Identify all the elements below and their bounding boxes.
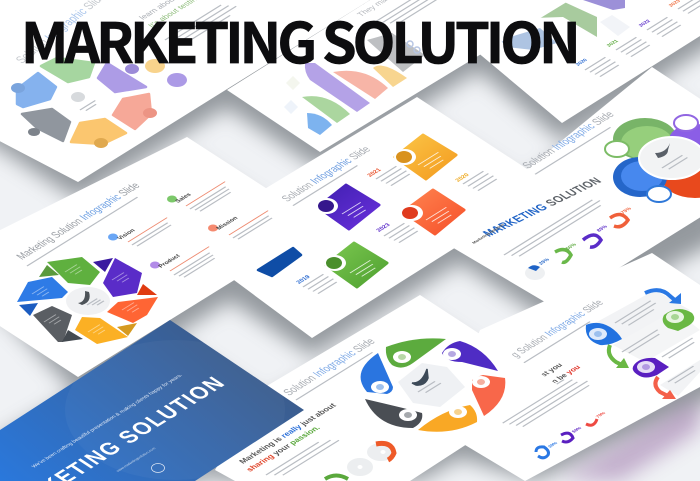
year label 2023: 2023 — [376, 222, 393, 233]
badge green — [605, 141, 629, 157]
mission item: Mission — [216, 216, 240, 231]
blue circle — [613, 157, 667, 197]
title underline — [534, 127, 610, 175]
centre icon — [71, 92, 85, 102]
purple shape — [583, 0, 625, 10]
decorative circle — [65, 340, 285, 480]
orange circle — [662, 158, 700, 198]
segment badges — [11, 64, 157, 148]
green inner — [621, 126, 673, 160]
product item: Product — [158, 254, 182, 269]
yellow sector — [418, 405, 477, 432]
sector badges — [371, 348, 490, 421]
green teardrop — [663, 309, 694, 331]
title underline — [286, 165, 357, 210]
sales item: Sales — [175, 192, 194, 204]
red sector — [472, 375, 505, 416]
stat purple: 85% — [596, 224, 610, 233]
green shape — [533, 0, 597, 37]
icon: swoosh — [655, 143, 670, 158]
centre hexagon — [398, 363, 465, 407]
icon: small star — [286, 76, 300, 90]
green corner — [39, 265, 59, 277]
slide title: g Solution Infographic Slide — [508, 298, 607, 360]
stat red: 75% — [620, 206, 634, 215]
timeline text lines — [585, 0, 700, 78]
bar purple — [305, 63, 370, 112]
slide: top right timeline — [415, 0, 700, 123]
purple teardrop — [633, 358, 669, 378]
icon: swoosh — [412, 369, 428, 385]
green segment — [41, 58, 94, 82]
heading line two: an be you — [545, 363, 583, 387]
vision item — [108, 218, 171, 247]
title underline — [27, 197, 138, 266]
stat red ring: 70% — [595, 411, 606, 419]
blue inner — [621, 161, 663, 191]
year label 2021: 2021 — [606, 39, 620, 48]
blue corner — [19, 303, 38, 316]
title underline — [522, 322, 590, 364]
slide: centre year cards — [180, 97, 553, 338]
grey panel 2 — [613, 310, 700, 362]
text lines — [165, 1, 240, 48]
stat red ring — [586, 411, 606, 425]
icon: play circle — [152, 464, 164, 472]
yellow card — [394, 135, 456, 179]
slide: left octagon — [0, 137, 323, 377]
red ring stat — [367, 443, 395, 461]
red card — [401, 190, 464, 234]
centre disc — [66, 287, 110, 315]
cover tagline: We've been crafting beautiful presentation & making clients happy for years. — [31, 373, 184, 469]
centre lines — [87, 298, 104, 308]
blue segment — [17, 277, 68, 302]
yellow segment — [71, 119, 126, 144]
heading line two: sharing your passion. — [244, 424, 322, 473]
stat blue ring — [536, 441, 558, 458]
year label 2020: 2020 — [455, 172, 472, 183]
product item — [150, 247, 216, 279]
mission item — [208, 211, 272, 240]
blue card — [258, 248, 301, 276]
year label 2019: 2019 — [296, 274, 313, 285]
slide title: Solution Infographic Slide — [520, 109, 618, 171]
purple shadow tint bottom right — [560, 398, 700, 481]
year label 2021: 2021 — [367, 167, 384, 178]
centre lines — [662, 155, 687, 171]
grey shape — [367, 33, 425, 72]
panel lines — [615, 300, 698, 385]
purple sector — [442, 341, 498, 371]
faded blue shape — [500, 28, 557, 50]
sales item — [167, 182, 232, 213]
purple circle — [669, 124, 700, 156]
slide title: g Solution Infographic Slide — [273, 145, 374, 208]
stat red — [610, 206, 634, 227]
arrow: blue — [645, 290, 681, 304]
slide: top centre bar chart — [227, 0, 570, 152]
purple corner — [93, 258, 113, 272]
stat purple — [583, 224, 610, 247]
body lines — [504, 198, 604, 260]
slide title: Marketing Solution Infographic Slide — [14, 181, 143, 262]
year label 2022: 2022 — [638, 19, 652, 28]
centre text lines — [80, 100, 99, 112]
grey segment — [22, 109, 70, 141]
dark segment — [33, 306, 72, 342]
red corner — [137, 284, 157, 295]
stat green: 50% — [565, 242, 579, 251]
stat purple ring: 50% — [571, 426, 582, 434]
slide: top left circular diagram — [0, 0, 370, 182]
yellow corner — [117, 323, 137, 336]
icon: purple circle — [167, 73, 187, 87]
body lines — [496, 373, 592, 433]
purple segment — [98, 63, 146, 92]
stat green — [555, 242, 579, 262]
green card — [324, 243, 387, 287]
badge blue — [647, 186, 671, 202]
salmon segment — [113, 94, 151, 129]
bar salmon — [333, 71, 388, 99]
green ring stat — [325, 476, 348, 479]
badge purple — [674, 115, 698, 131]
badge icons — [376, 351, 485, 418]
slide: bottom centre circle — [215, 295, 558, 481]
divider text: Marketing Solution — [471, 222, 506, 245]
body lines — [266, 435, 339, 480]
grey panel 3 — [660, 360, 700, 396]
centre lines — [418, 380, 441, 395]
vision item: Vision — [117, 228, 137, 241]
blue sector — [361, 353, 393, 394]
cover url: www.marketingsolution.com — [116, 447, 157, 473]
icon: swoosh — [78, 291, 90, 305]
main title: MARKETING SOLUTION — [21, 0, 577, 79]
purple card — [316, 185, 379, 229]
stat blue ring: 30% — [547, 441, 558, 449]
heading line one: st you — [538, 361, 565, 378]
year label 2020: 2020 — [575, 58, 589, 67]
bar blue — [307, 113, 332, 135]
heading line one: Marketing is really just about — [237, 402, 338, 465]
light hexagon — [600, 15, 630, 36]
slide: bottom right flow — [440, 253, 700, 481]
green circle — [613, 118, 677, 160]
red segment — [107, 297, 158, 323]
title underline — [296, 352, 372, 400]
small icon circles — [407, 41, 420, 53]
segment lines — [32, 265, 141, 336]
stat blue: 25% — [538, 257, 552, 266]
green segment — [47, 257, 100, 285]
centre panel — [639, 137, 700, 179]
grey ring stat — [347, 458, 373, 476]
purple segment — [103, 258, 142, 297]
stat blue — [525, 257, 552, 280]
arrow: green — [609, 345, 629, 368]
grey panel 1 — [595, 290, 690, 347]
bar yellow — [373, 66, 407, 87]
blue teardrop — [586, 323, 622, 345]
slide: right marketing solution — [440, 67, 700, 308]
bar green — [302, 96, 350, 123]
text lines — [303, 165, 498, 295]
yellow segment — [75, 317, 128, 344]
slide title: Solution Infographic Slide — [281, 336, 379, 398]
blue segment — [17, 73, 56, 107]
icon: yellow circle — [145, 59, 165, 73]
big heading: MARKETING SOLUTION — [481, 176, 605, 239]
slide: blue cover — [0, 320, 304, 481]
green sector — [386, 338, 446, 368]
text lines — [375, 0, 454, 30]
dark sector — [365, 399, 422, 428]
arrow: red — [655, 377, 676, 399]
stat purple ring — [561, 426, 582, 442]
dark corner — [62, 330, 83, 342]
icon: small drop — [284, 100, 298, 114]
